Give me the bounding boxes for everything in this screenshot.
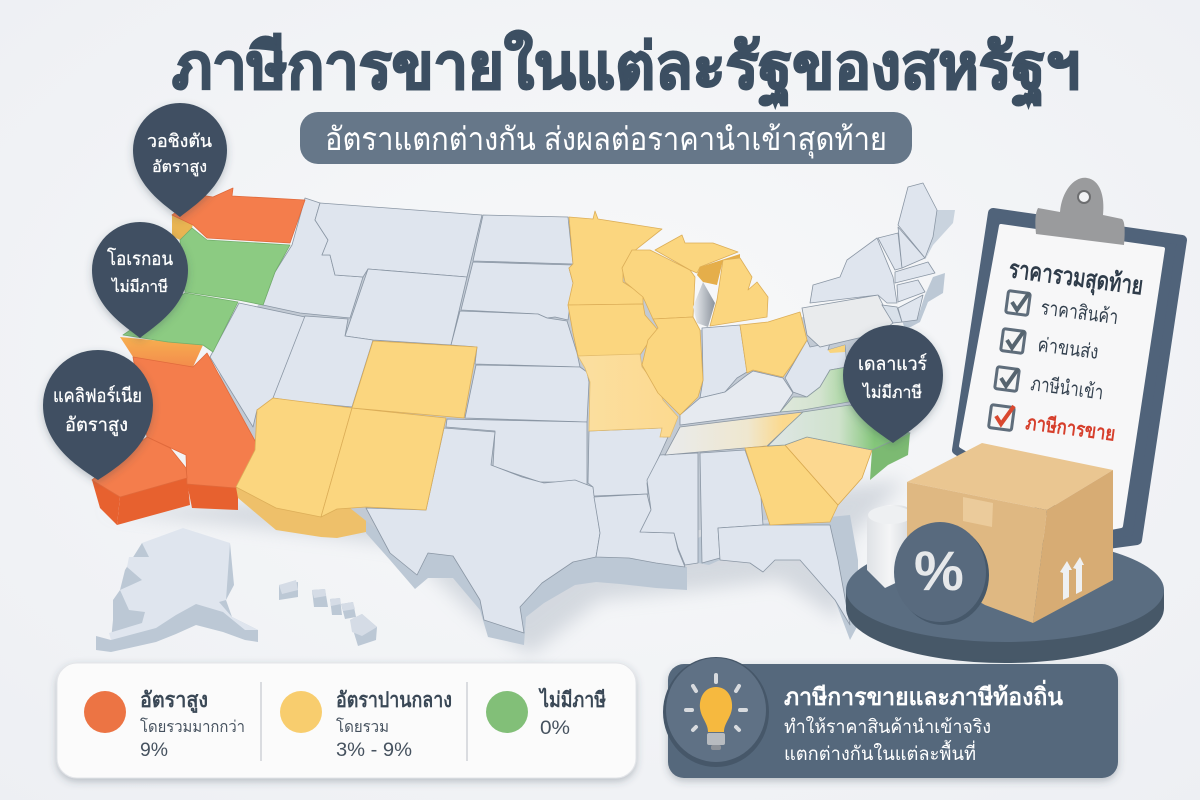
- legend: mid rate: [280, 689, 452, 761]
- legend: no tax: [486, 687, 606, 739]
- checklist: ราคาสินค้า: [1039, 297, 1120, 329]
- callout text: [784, 679, 1064, 765]
- callout panel: [663, 657, 1118, 778]
- states with no data: grey: [210, 183, 937, 633]
- pin: California: แคลิฟอร์เนีย: [53, 385, 142, 407]
- checklist: ภาษีนำเข้า: [1029, 373, 1105, 404]
- icon: this-way-up arrows: [1060, 557, 1084, 600]
- legend: high rate: [84, 689, 245, 761]
- Alaska: [96, 528, 258, 652]
- legend: mid rate: โดยรวม: [336, 717, 389, 736]
- checklist: ภาษีการขาย: [1024, 411, 1117, 446]
- callout text: ทำให้ราคาสินค้านำเข้าจริง: [784, 716, 991, 738]
- yellow: mid rate states: [236, 211, 872, 525]
- pin: Washington: [133, 103, 227, 217]
- green: no tax states: [123, 228, 910, 450]
- pin: Washington: วอชิงตัน: [147, 131, 212, 151]
- extruded sides: [92, 195, 955, 645]
- pin: Delaware: [843, 325, 943, 443]
- icon: percent badge: [894, 522, 989, 625]
- legend: high rate: โดยรวมมากกว่า: [140, 717, 245, 736]
- pin: Oregon: โอเรกอน: [107, 247, 173, 270]
- clipboard clip: [1035, 178, 1125, 245]
- pin: Oregon: ไม่มีภาษี: [110, 277, 168, 296]
- subtitle pill: [300, 112, 912, 164]
- checklist: ค่าขนส่ง: [1036, 334, 1100, 364]
- map base fills seams between states: [215, 210, 880, 600]
- subtitle pill: อัตราแตกต่างกัน ส่งผลต่อราคานำเข้าสุดท้าย: [325, 121, 887, 159]
- legend panel: [57, 663, 636, 778]
- orange: high rate states: [92, 188, 305, 497]
- pin: Washington: อัตราสูง: [152, 159, 207, 177]
- pin: California: [43, 350, 153, 480]
- pin: Delaware: เดลาแวร์: [858, 353, 927, 375]
- cardboard box: [907, 443, 1113, 623]
- packing tape roll: [867, 505, 912, 588]
- map of the United States: [92, 183, 955, 655]
- callout text: ภาษีการขายและภาษีท้องถิ่น: [784, 679, 1064, 711]
- callout text: แตกต่างกันในแต่ละพื้นที่: [784, 740, 976, 765]
- legend: high rate: 9%: [140, 740, 168, 761]
- platform: [846, 538, 1164, 663]
- clipboard heading: ราคารวมสุดท้าย: [1007, 255, 1145, 303]
- legend: mid rate: 3% - 9%: [336, 740, 412, 761]
- legend: high rate: อัตราสูง: [140, 689, 208, 714]
- legend: no tax: 0%: [540, 718, 570, 739]
- pin: California: อัตราสูง: [65, 415, 128, 436]
- icon: light bulb: [663, 657, 769, 767]
- pin: Delaware: ไม่มีภาษี: [861, 382, 922, 402]
- legend: no tax: ไม่มีภาษี: [538, 687, 606, 712]
- Hawaii: [279, 580, 377, 646]
- title: ภาษีการขายในแต่ละรัฐของสหรัฐฯ: [172, 30, 1080, 107]
- legend: mid rate: อัตราปานกลาง: [336, 689, 452, 712]
- clipboard: [957, 178, 1182, 545]
- pin: Oregon: [92, 222, 188, 338]
- icon: percent badge: %: [914, 539, 964, 602]
- checklist: [989, 291, 1120, 446]
